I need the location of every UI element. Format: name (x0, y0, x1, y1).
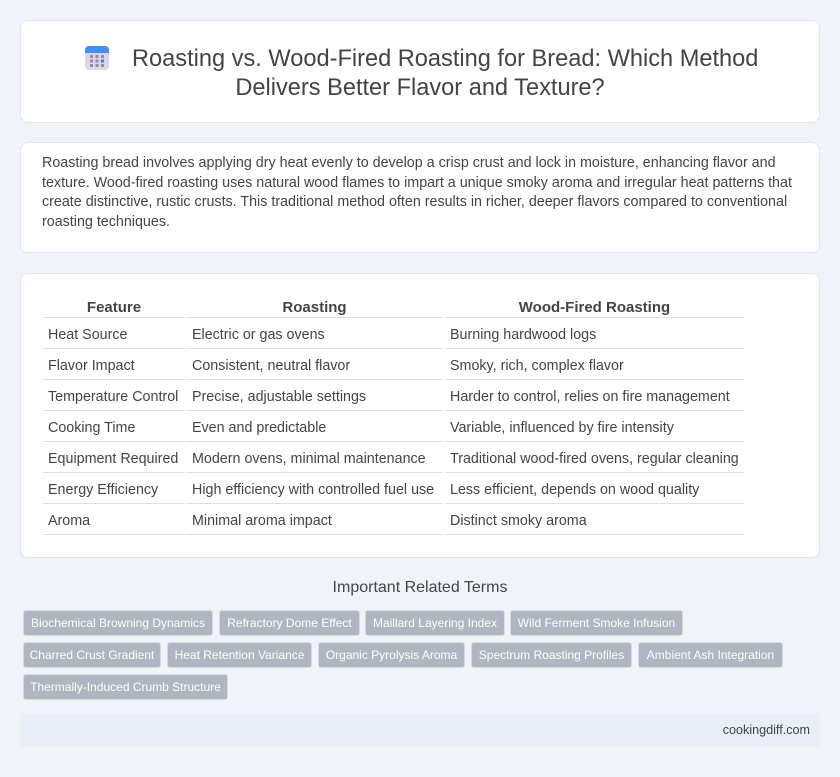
column header: Feature: Feature (87, 299, 141, 316)
comparison table: Temperature Control (48, 389, 178, 405)
comparison table: Distinct smoky aroma (450, 513, 587, 529)
comparison table: Even and predictable (192, 420, 326, 436)
comparison table: Harder to control, relies on fire management (450, 389, 730, 405)
comparison table: Flavor Impact (48, 358, 135, 374)
comparison table: Burning hardwood logs (450, 327, 596, 343)
header panel (20, 20, 820, 123)
related terms heading: Important Related Terms (333, 579, 507, 596)
comparison table: Heat Source (48, 327, 127, 343)
title (132, 46, 758, 101)
related term tags: Heat Retention Variance (175, 648, 304, 662)
footer bar (20, 713, 820, 747)
comparison table: Electric or gas ovens (192, 327, 325, 343)
comparison table: Minimal aroma impact (192, 513, 332, 529)
related term tags: Thermally-Induced Crumb Structure (30, 680, 221, 694)
intro text: create distinctive, rustic crusts. This traditional method often results in richer, deeper flavors compared to conventional (42, 194, 787, 210)
related term tags: Wild Ferment Smoke Infusion (518, 616, 675, 630)
comparison table: High efficiency with controlled fuel use (192, 482, 434, 498)
related term tags: Maillard Layering Index (373, 616, 497, 630)
comparison table panel (20, 273, 820, 558)
related term tags: Ambient Ash Integration (647, 648, 774, 662)
intro text (42, 155, 792, 230)
comparison table: Less efficient, depends on wood quality (450, 482, 699, 498)
column header: Roasting: Roasting (282, 299, 347, 316)
comparison table: Equipment Required (48, 451, 178, 467)
related term tags (23, 610, 783, 700)
comparison table: Aroma (48, 513, 90, 529)
intro text: texture. Wood-fired roasting uses natural wood flames to impart a unique smoky aroma and irregular heat patterns that (42, 175, 792, 191)
intro text: roasting techniques. (42, 214, 170, 230)
intro panel (20, 142, 820, 253)
footer source text: cookingdiff.com (723, 723, 810, 737)
related term tags: Refractory Dome Effect (227, 616, 352, 630)
comparison table: Variable, influenced by fire intensity (450, 420, 674, 436)
comparison table: Energy Efficiency (48, 482, 158, 498)
comparison table: Consistent, neutral flavor (192, 358, 350, 374)
comparison table: Traditional wood-fired ovens, regular cleaning (450, 451, 739, 467)
related term tags: Organic Pyrolysis Aroma (326, 648, 457, 662)
related term tags: Spectrum Roasting Profiles (479, 648, 624, 662)
title: Delivers Better Flavor and Texture? (235, 75, 605, 101)
icon: calendar (85, 46, 109, 70)
comparison table: Modern ovens, minimal maintenance (192, 451, 426, 467)
title: Roasting vs. Wood-Fired Roasting for Bread: Which Method (132, 46, 758, 72)
related term tags: Biochemical Browning Dynamics (31, 616, 205, 630)
comparison table: Smoky, rich, complex flavor (450, 358, 624, 374)
intro text: Roasting bread involves applying dry heat evenly to develop a crisp crust and lock in moisture, enhancing flavor and (42, 155, 776, 171)
comparison table: Cooking Time (48, 420, 135, 436)
comparison table: Precise, adjustable settings (192, 389, 366, 405)
comparison table (43, 299, 744, 535)
related term tags: Charred Crust Gradient (30, 648, 154, 662)
column header: Wood-Fired Roasting: Wood-Fired Roasting (519, 299, 670, 316)
